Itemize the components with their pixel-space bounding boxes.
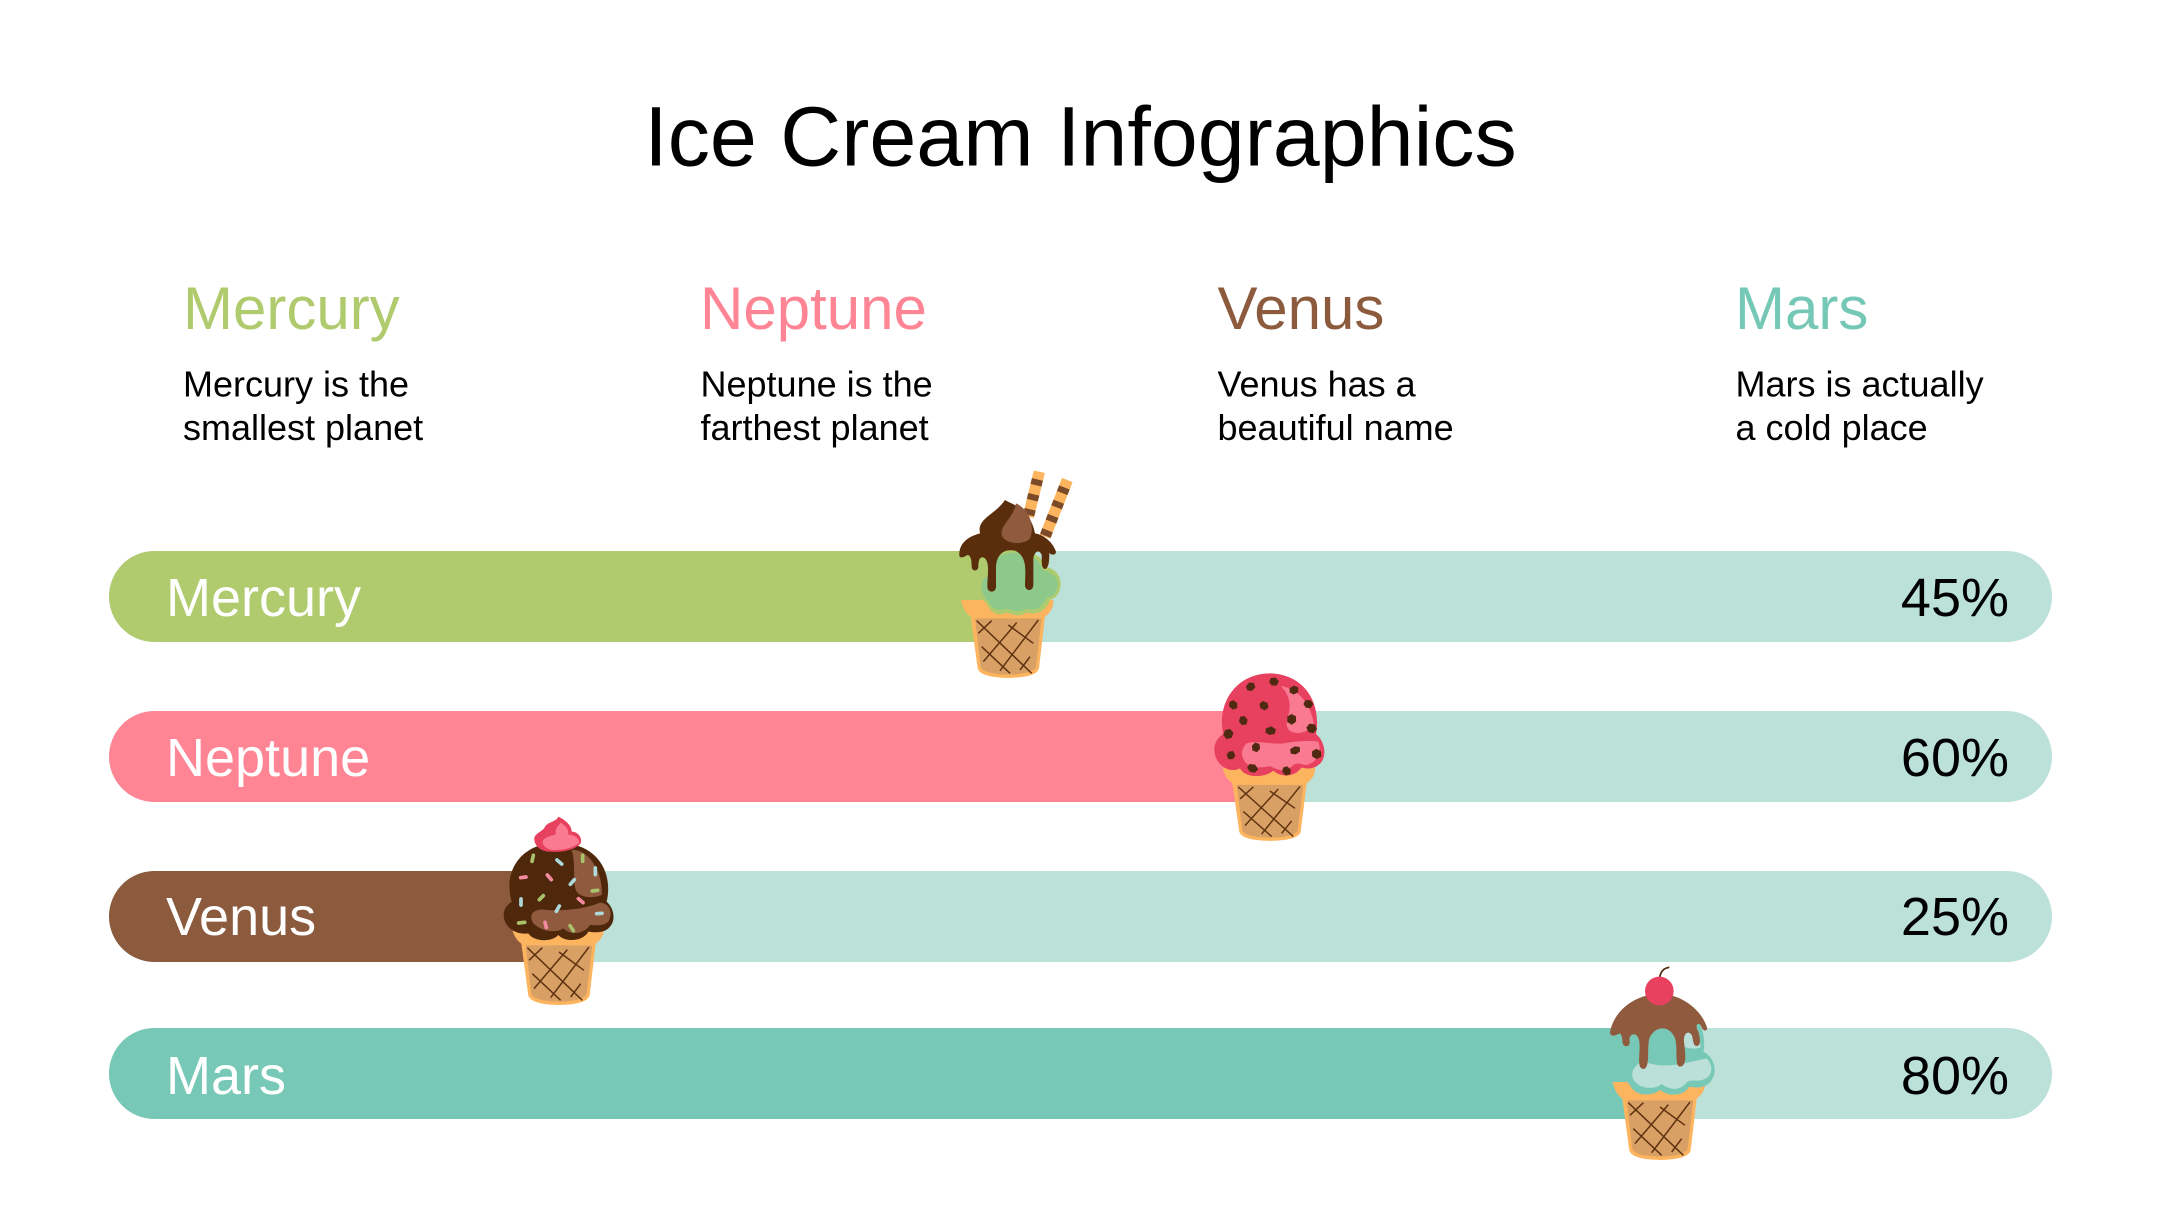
bar: Neptune 60% [109, 711, 2052, 802]
bar: Mercury 45%: Mercury [166, 568, 361, 628]
column: Neptune: Neptune is the [700, 364, 933, 404]
panel: planet descriptions [183, 275, 1984, 448]
column: Venus: beautiful name [1218, 407, 1454, 448]
column: Venus [1218, 275, 1454, 448]
column: Mars: Mars is actually [1736, 364, 1984, 404]
column: Mars [1735, 275, 1984, 448]
bar: Neptune 60%: Neptune [166, 728, 370, 788]
bar: Venus 25%: 25% [1901, 887, 2009, 947]
column: Neptune [700, 275, 933, 448]
bar: Mars 80%: Mars [166, 1046, 286, 1106]
icon: chocolate sprinkle ice cream [504, 817, 614, 1005]
icon: strawberry chocolate chip ice cream [1214, 673, 1324, 841]
bar: Mercury 45%: 45% [1901, 568, 2009, 628]
column: Mars: a cold place [1736, 407, 1928, 448]
bar: Venus 25% [109, 871, 2052, 962]
bar: Mars 80% [109, 1028, 2052, 1119]
bar: Mercury 45% [109, 551, 2052, 642]
column: Neptune: Neptune [700, 275, 927, 342]
title: Ice Cream Infographics [644, 90, 1517, 184]
column: Mercury: smallest planet [183, 407, 423, 448]
column: Mercury: Mercury is the [183, 364, 409, 404]
column: Mercury [183, 275, 423, 448]
column: Venus: Venus [1218, 275, 1384, 342]
column: Venus: Venus has a [1218, 364, 1417, 404]
bar: Venus 25%: Venus [166, 887, 316, 947]
icon: chocolate mint ice cream with wafers [959, 472, 1067, 678]
column: Neptune: farthest planet [700, 407, 929, 448]
column: Mars: Mars [1735, 275, 1868, 342]
bar: Mars 80%: 80% [1901, 1046, 2009, 1106]
icon: cherry mint ice cream [1610, 967, 1715, 1160]
bar: Neptune 60%: 60% [1901, 728, 2009, 788]
column: Mercury: Mercury [183, 275, 400, 342]
